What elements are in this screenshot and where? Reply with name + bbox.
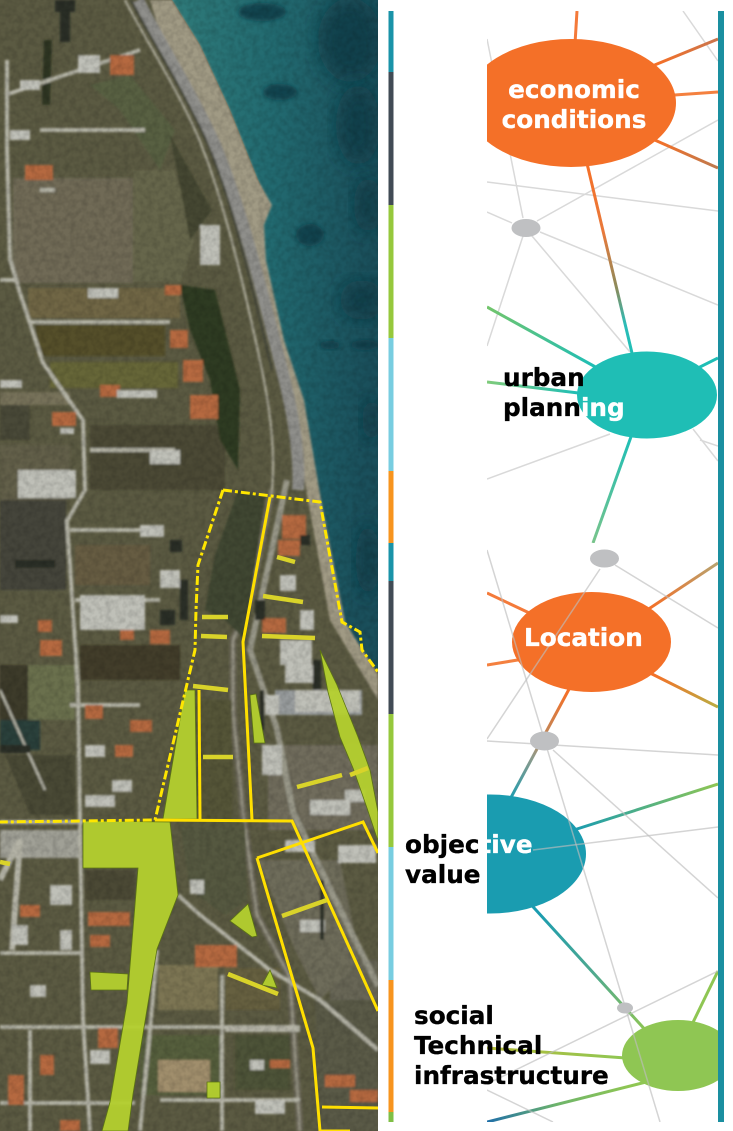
label: objective value: value bbox=[405, 860, 481, 889]
lower left fields bbox=[0, 500, 66, 590]
coloured links lower bbox=[487, 563, 718, 1122]
label: social technical infrastructure: infrastructure bbox=[414, 1061, 609, 1090]
railway and parallel track bbox=[125, 0, 273, 490]
yellow plot strips bbox=[0, 557, 368, 994]
grey background links bbox=[487, 11, 718, 479]
top network section bbox=[466, 11, 718, 543]
grey links lower bbox=[487, 550, 718, 1122]
label: urban planning: urban bbox=[503, 363, 585, 392]
node: economic conditions bbox=[466, 39, 676, 167]
label: social technical infrastructure: Technical bbox=[414, 1031, 542, 1060]
lower road network bbox=[0, 50, 378, 1131]
dashed boundary lines bbox=[0, 490, 378, 822]
land features blurred group bbox=[0, 0, 378, 1131]
node: location bbox=[512, 592, 671, 692]
rooftops: dark shadows bbox=[0, 0, 324, 940]
right vertical bar bbox=[718, 11, 724, 1122]
label: economic conditions: conditions bbox=[502, 105, 646, 134]
coastal road bbox=[138, 0, 298, 490]
label: location: Location bbox=[524, 623, 643, 652]
label: urban planning: planning bbox=[503, 393, 625, 422]
left segmented colour bar bbox=[388, 11, 394, 1122]
label: economic conditions: economic bbox=[508, 75, 640, 104]
node: urban planning bbox=[577, 352, 717, 438]
node: objective value bbox=[487, 794, 586, 914]
panel: network diagram with labelled factors bbox=[388, 11, 724, 1122]
dark tree belt bbox=[180, 285, 240, 470]
rooftops: orange bbox=[8, 55, 378, 1131]
label: objective value: objective bbox=[405, 830, 533, 859]
coloured links bbox=[487, 11, 718, 543]
land base bbox=[0, 0, 378, 1131]
sea bbox=[172, 0, 384, 672]
grey node upper bbox=[512, 219, 540, 237]
node: social technical infrastructure bbox=[622, 1020, 718, 1091]
rooftops: white and grey bbox=[0, 55, 376, 1114]
label: social technical infrastructure: social bbox=[414, 1001, 494, 1030]
top fields bbox=[13, 178, 133, 283]
beach strip bbox=[150, 0, 378, 700]
panel: satellite map of the coastal area bbox=[0, 0, 378, 1131]
texture overlay bbox=[0, 0, 378, 1131]
grey nodes lower bbox=[530, 550, 633, 1014]
yellow-green parcels bbox=[83, 650, 378, 1131]
bottom network section bbox=[487, 550, 718, 1122]
solid road boundary lines bbox=[155, 497, 378, 1131]
